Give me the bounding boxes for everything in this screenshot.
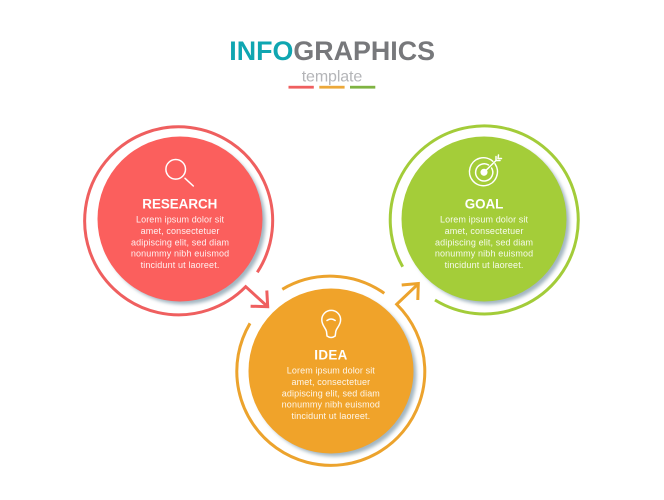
- shadow: goal: [406, 140, 570, 304]
- icon: magnifier: [166, 160, 193, 186]
- text: research: [131, 215, 229, 270]
- text: goal: amet, consectetuer: [445, 226, 523, 236]
- shadow: research: [102, 140, 266, 304]
- disc: idea: [248, 288, 414, 454]
- disc: goal: [402, 136, 566, 302]
- text: goal: tincidunt ut laoreet.: [445, 260, 523, 270]
- heading: research: RESEARCH: [142, 196, 217, 211]
- title block: [229, 36, 435, 89]
- ring: goal: [390, 126, 578, 314]
- text: idea: amet, consectetuer: [291, 377, 370, 387]
- text: goal: [435, 215, 533, 270]
- text: goal: Lorem ipsum dolor sit: [440, 215, 528, 225]
- text: research: adipiscing elit, sed diam: [131, 237, 229, 247]
- text: goal: nonummy nibh euismod: [435, 249, 533, 259]
- heading: goal: GOAL: [465, 196, 503, 211]
- panel: idea: [237, 276, 425, 465]
- title: INFOGRAPHICS: [229, 36, 435, 66]
- panel: research: [85, 127, 273, 315]
- icon: target: [469, 155, 502, 186]
- text: research: tincidunt ut laoreet.: [141, 260, 219, 270]
- text: research: nonummy nibh euismod: [131, 249, 229, 259]
- text: research: Lorem ipsum dolor sit: [136, 215, 224, 225]
- ring and arrow: research: [85, 127, 273, 315]
- text: idea: tincidunt ut laoreet.: [291, 411, 370, 421]
- disc: research: [98, 136, 262, 302]
- text: idea: nonummy nibh euismod: [282, 400, 380, 410]
- shadow: idea: [252, 292, 416, 456]
- ring and arrow: idea: [237, 276, 425, 465]
- text: idea: [282, 366, 380, 421]
- panel: goal: [390, 126, 578, 314]
- text: goal: adipiscing elit, sed diam: [435, 237, 533, 247]
- icon: light bulb: [322, 310, 341, 338]
- heading: idea: IDEA: [314, 348, 348, 362]
- colour key bars: [288, 86, 375, 89]
- text: idea: Lorem ipsum dolor sit: [287, 366, 375, 376]
- subtitle: template: [302, 69, 362, 86]
- text: research: amet, consectetuer: [141, 226, 219, 236]
- text: idea: adipiscing elit, sed diam: [282, 388, 380, 398]
